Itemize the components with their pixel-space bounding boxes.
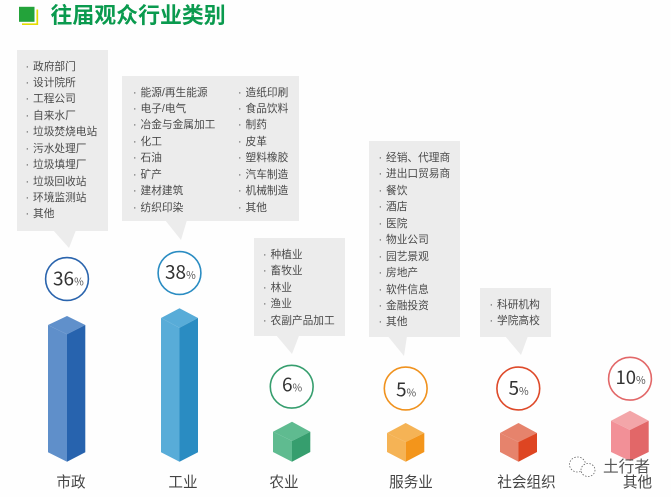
list: municipal: 自来水厂 bbox=[33, 110, 76, 122]
cube: services bbox=[387, 423, 424, 462]
list: social organisation: 科研机构 bbox=[497, 299, 540, 311]
list: industry column two: 机械制造 bbox=[246, 185, 288, 197]
list: industry column two: 汽车制造 bbox=[246, 169, 288, 181]
list: agriculture bbox=[264, 248, 335, 327]
label: services: 服务业 bbox=[389, 475, 433, 491]
percentage: 5% bbox=[384, 367, 427, 410]
panel: industry list bbox=[122, 76, 299, 221]
list: municipal: 污水处理厂 bbox=[33, 143, 86, 155]
list: industry column two: 食品饮料 bbox=[246, 103, 288, 115]
list: industry column two: 造纸印刷 bbox=[246, 86, 288, 98]
panel: municipal list bbox=[17, 50, 108, 231]
panel: social organisation list bbox=[480, 288, 551, 337]
percentage: 38%: 38% bbox=[165, 258, 196, 285]
list: services: 物业公司 bbox=[386, 234, 429, 246]
list: industry column two: 皮革 bbox=[246, 136, 267, 148]
list: social organisation: 学院高校 bbox=[497, 315, 540, 327]
icon: title marker bbox=[19, 6, 38, 25]
list: industry column one: 冶金与金属加工 bbox=[140, 119, 215, 131]
list: services: 软件信息 bbox=[386, 284, 429, 296]
list: industry column one: 矿产 bbox=[140, 169, 162, 181]
list: municipal bbox=[26, 60, 97, 220]
list: services: 房地产 bbox=[386, 267, 418, 279]
list: services: 进出口贸易商 bbox=[386, 168, 450, 180]
list: municipal: 垃圾回收站 bbox=[33, 176, 86, 188]
list: agriculture: 渔业 bbox=[270, 298, 292, 310]
list: services: 经销、代理商 bbox=[386, 152, 450, 164]
label: municipal: 市政 bbox=[56, 475, 86, 491]
list: social organisation bbox=[490, 298, 540, 327]
list: agriculture: 种植业 bbox=[270, 249, 303, 261]
percentage: 38% bbox=[158, 252, 201, 294]
list: industry column two: 其他 bbox=[246, 202, 267, 214]
panel: services list bbox=[369, 141, 460, 337]
percentage: 36% bbox=[46, 258, 88, 300]
list: services: 园艺景观 bbox=[386, 251, 429, 263]
bar: municipal bbox=[48, 316, 85, 462]
list: municipal: 环境监测站 bbox=[33, 192, 86, 204]
list: services: 餐饮 bbox=[386, 185, 407, 197]
watermark bbox=[569, 456, 650, 477]
list: services: 其他 bbox=[386, 316, 407, 328]
panel: agriculture list bbox=[254, 238, 345, 336]
list: municipal: 政府部门 bbox=[33, 60, 76, 72]
percentage: 36%: 36% bbox=[53, 264, 84, 291]
list: industry column one: 化工 bbox=[140, 136, 162, 148]
list: industry column one bbox=[134, 86, 215, 214]
list: agriculture: 林业 bbox=[270, 282, 292, 294]
label: social organisation: 社会组织 bbox=[497, 475, 556, 491]
cube: other bbox=[611, 411, 649, 461]
label: industry: 工业 bbox=[168, 475, 198, 491]
list: municipal: 垃圾焚烧电站 bbox=[33, 126, 97, 138]
list: industry column one: 能源/再生能源 bbox=[140, 86, 208, 98]
list: agriculture: 畜牧业 bbox=[270, 265, 303, 277]
list: municipal: 工程公司 bbox=[33, 93, 76, 105]
list: services: 金融投资 bbox=[386, 300, 429, 312]
list: industry column two bbox=[239, 86, 288, 214]
cube: agriculture bbox=[273, 422, 310, 462]
list: services: 医院 bbox=[386, 218, 407, 230]
percentage: 10% bbox=[609, 357, 651, 400]
list: industry column one: 电子/电气 bbox=[140, 103, 186, 115]
percentage: 10%: 10% bbox=[616, 364, 646, 390]
list: municipal: 其他 bbox=[33, 208, 54, 220]
list: industry column one: 纺织印染 bbox=[140, 202, 183, 214]
list: agriculture: 农副产品加工 bbox=[270, 315, 335, 327]
list: industry column two: 塑料橡胶 bbox=[246, 152, 288, 164]
bar: industry bbox=[161, 308, 198, 462]
watermark text: 土行者 bbox=[603, 459, 650, 476]
percentage: 6% bbox=[270, 365, 313, 408]
list: industry column one: 石油 bbox=[140, 152, 162, 164]
list: municipal: 设计院所 bbox=[33, 77, 76, 89]
label: agriculture: 农业 bbox=[269, 475, 299, 491]
percentage: 6%: 6% bbox=[282, 371, 303, 398]
icon: chat bubbles bbox=[569, 456, 596, 477]
percentage: 5% bbox=[497, 367, 540, 410]
list: municipal: 垃圾填埋厂 bbox=[33, 159, 86, 171]
list: industry column one: 建材建筑 bbox=[140, 185, 183, 197]
list: services: 酒店 bbox=[386, 201, 407, 213]
percentage: 5%: 5% bbox=[508, 374, 529, 401]
label: other: 其他 bbox=[623, 475, 652, 491]
list: services bbox=[380, 152, 450, 328]
percentage: 5%: 5% bbox=[396, 376, 417, 403]
title: 往届观众行业类别 bbox=[50, 3, 226, 28]
list: industry column two: 制药 bbox=[246, 119, 267, 131]
cube: social organisation bbox=[500, 423, 537, 462]
